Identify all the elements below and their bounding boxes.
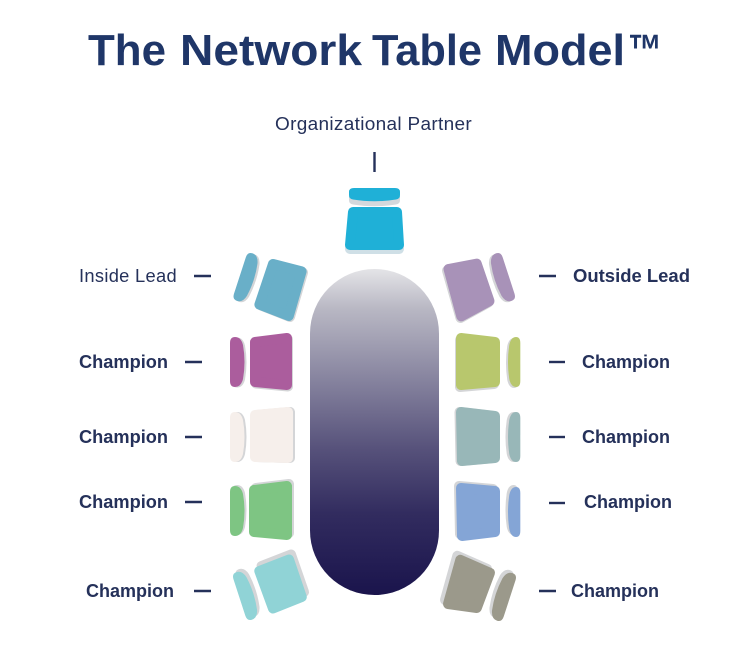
- label: champion right 2: Champion: [582, 427, 670, 447]
- label: champion left 3: Champion: [79, 492, 168, 512]
- table: [310, 269, 439, 595]
- title: Network: [180, 26, 363, 75]
- chair: outside lead: [447, 252, 516, 318]
- label: organizational partner: Organizational Partner: [275, 114, 472, 134]
- label: champion left 4: Champion: [86, 581, 174, 601]
- chair: organizational partner: [349, 188, 400, 249]
- chair: inside lead: [232, 252, 303, 317]
- label: champion left 1: Champion: [79, 352, 168, 372]
- chair: champion taupe: [445, 556, 517, 622]
- chair: champion green: [230, 484, 289, 536]
- chair: champion lime: [460, 337, 520, 388]
- label: champion left 2: Champion: [79, 427, 168, 447]
- label: champion right 4: Champion: [571, 581, 659, 601]
- label: champion right 3: Champion: [584, 492, 672, 512]
- chair: champion cream: [230, 412, 290, 462]
- chair: champion sage: [460, 412, 520, 462]
- title: Table: [372, 26, 482, 75]
- chair: champion aqua: [232, 554, 304, 621]
- title: The: [88, 26, 166, 75]
- label: inside lead: Inside Lead: [79, 266, 177, 286]
- title: Model: [495, 26, 625, 75]
- chair: champion magenta: [230, 337, 288, 388]
- label: outside lead: Outside Lead: [573, 266, 690, 286]
- title: ™: [628, 26, 662, 75]
- label: champion right 1: Champion: [582, 352, 670, 372]
- title: [88, 26, 662, 75]
- chair: champion blue: [459, 485, 520, 537]
